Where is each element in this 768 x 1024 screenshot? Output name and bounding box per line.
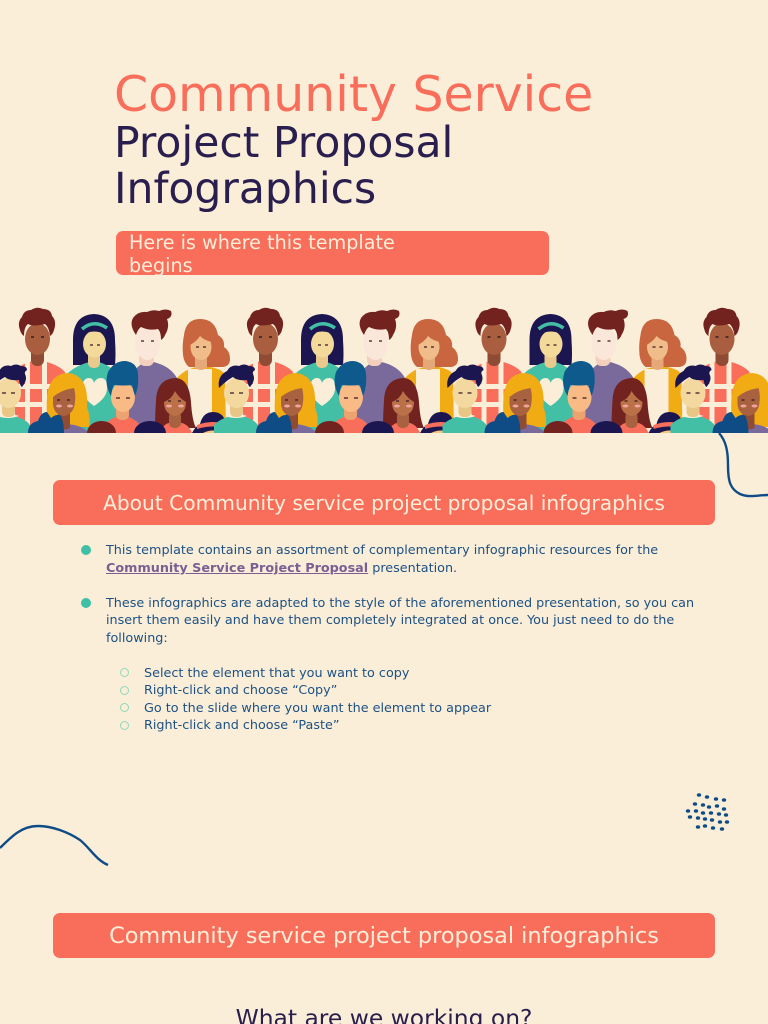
step 2 marker — [120, 686, 129, 695]
subtitle text — [129, 231, 395, 277]
bullet list — [81, 543, 694, 733]
bullet 1 text — [106, 543, 658, 576]
heading band: infographics — [53, 913, 715, 958]
bullet 2 text: following: — [106, 631, 168, 646]
heading band: about — [53, 480, 715, 525]
step 1 text: Select the element that you want to copy — [144, 666, 409, 681]
subtitle text: Here is where this template — [129, 231, 395, 254]
subtitle text: begins — [129, 254, 193, 277]
heading band: infographics: Community service project proposal infographics — [109, 923, 659, 949]
title: Project Proposal Infographics: Infographics — [114, 164, 376, 214]
bullet 2 text — [106, 596, 694, 646]
bullet 1 text: Community Service Project Proposal presentation. — [106, 561, 457, 576]
step 4 marker — [120, 721, 129, 730]
step 1 marker — [120, 668, 129, 677]
bullet 2 text: These infographics are adapted to the style of the aforementioned presentation, so you can — [106, 596, 694, 610]
heading band: about: About Community service project proposal infographics — [103, 491, 665, 515]
step 2 text: Right-click and choose “Copy” — [144, 683, 337, 698]
bullet 2 text: insert them easily and have them completely integrated at once. You just need to do the — [106, 613, 674, 628]
step 3 marker — [120, 703, 129, 712]
title: Project Proposal Infographics — [114, 119, 453, 214]
title: Project Proposal Infographics: Project Proposal — [114, 119, 453, 168]
bullet 1 marker — [81, 545, 91, 555]
step 4 text: Right-click and choose “Paste” — [144, 718, 339, 733]
illustration: crowd of people — [0, 308, 768, 433]
subtitle banner — [116, 231, 549, 275]
step 3 text: Go to the slide where you want the element to appear — [144, 701, 491, 716]
bullet 1 text: This template contains an assortment of complementary infographic resources for the — [106, 543, 658, 558]
bullet 2 marker — [81, 598, 91, 608]
title: Community Service: Community Service — [114, 66, 593, 122]
